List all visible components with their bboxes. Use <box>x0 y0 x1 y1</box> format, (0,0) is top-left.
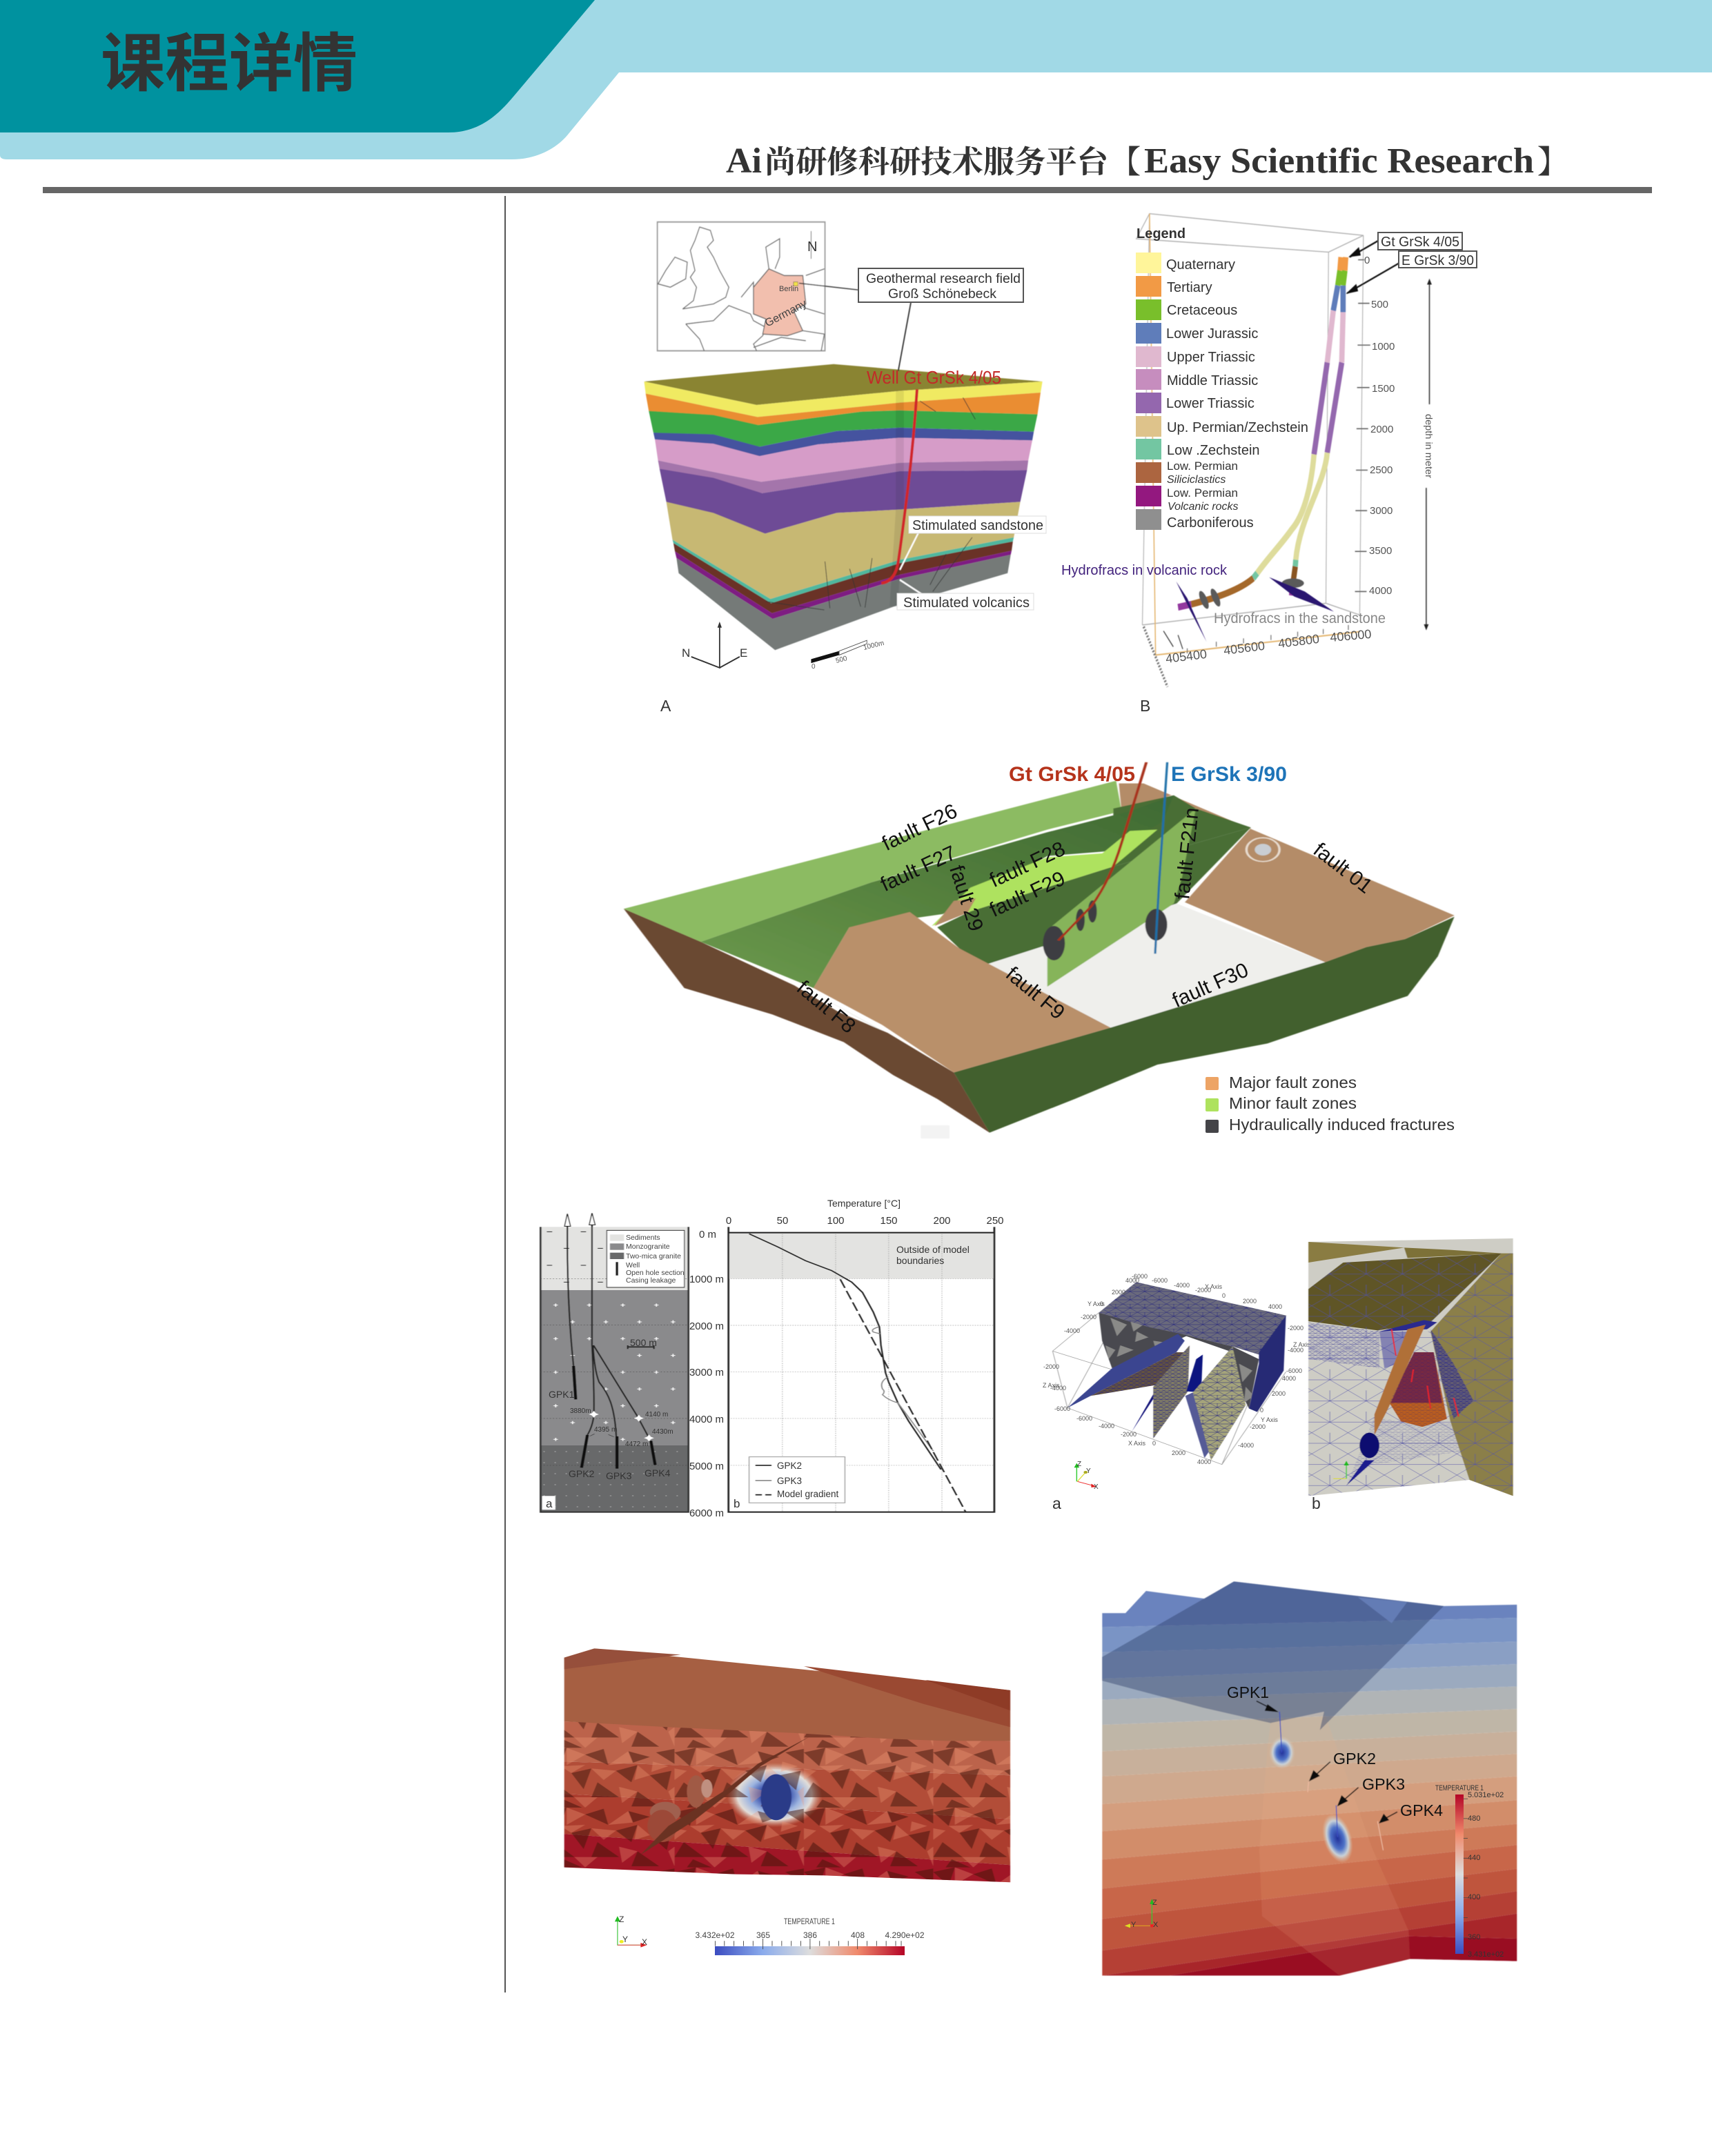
well names and depths: a <box>546 1497 553 1510</box>
axis tick labels: X Axis <box>1128 1440 1146 1447</box>
axis tick labels: -2000 <box>1081 1314 1096 1321</box>
well names and depths: 4430m <box>652 1428 673 1436</box>
axis tick labels: Y Axis <box>1261 1416 1278 1423</box>
fault labels: fault F28 <box>986 838 1069 892</box>
axis tick labels: -4000 <box>1288 1347 1303 1354</box>
axis tick labels: -4000 <box>1238 1442 1254 1449</box>
orientation axes: X <box>1153 1921 1159 1929</box>
temperature colour bar: 3.432e+02 <box>695 1930 735 1940</box>
depth axis: 1500 <box>1372 383 1395 395</box>
orientation axes: Y <box>1131 1921 1137 1929</box>
subtitle: Easy Scientific Research <box>1144 141 1534 181</box>
callout: stimulated sandstone: Stimulated sandstone <box>912 518 1043 533</box>
panel: well trajectories B <box>1061 214 1477 715</box>
well labels <box>1009 763 1287 786</box>
axis tick labels: -2000 <box>1195 1287 1211 1294</box>
compass and scale bar <box>682 622 885 671</box>
temperature axis: 100 <box>827 1215 845 1227</box>
orientation axes <box>615 1915 647 1948</box>
depth axis: 0 <box>1364 255 1370 266</box>
legend labels <box>1166 257 1308 531</box>
fault zone legend: Minor fault zones <box>1229 1094 1357 1112</box>
legend labels: Tertiary <box>1167 280 1212 295</box>
compass and scale bar: 0 <box>811 663 816 671</box>
axis tick labels: -4000 <box>1064 1327 1080 1334</box>
fault labels: fault 29 <box>945 862 987 934</box>
temperature colour bar: TEMPERATURE 1 <box>784 1917 835 1926</box>
temperature axis: Temperature [°C] <box>827 1198 901 1209</box>
axis tick labels: Y Axis <box>1088 1300 1105 1307</box>
figure label A: A <box>660 697 671 715</box>
fault labels: fault F29 <box>986 867 1069 922</box>
axis tick labels: -6000 <box>1054 1405 1070 1412</box>
block diagram layers <box>644 302 1043 650</box>
subtitle: Ai <box>726 141 762 181</box>
chart legend labels: Model gradient <box>777 1489 839 1499</box>
callout: geothermal research field: Groß Schönebeck <box>888 287 997 301</box>
legend labels: Quaternary <box>1166 257 1235 273</box>
legend <box>1136 226 1308 531</box>
temperature colour bar: 4.290e+02 <box>885 1930 925 1940</box>
well label: Well Gt GrSk 4/05 <box>867 367 1001 388</box>
axis tick labels: -4000 <box>1174 1282 1190 1289</box>
orientation axes: Y <box>1086 1467 1091 1475</box>
map labels: Berlin <box>779 285 798 293</box>
title: 课程详情 <box>101 29 357 99</box>
axis tick labels: -2000 <box>1250 1423 1266 1430</box>
compass and scale bar: N <box>682 646 690 660</box>
callout: stimulated volcanics: Stimulated volcanics <box>903 595 1030 611</box>
depth axis: 6000 m <box>689 1507 724 1519</box>
well names and depths: 3880m <box>570 1407 591 1415</box>
axis tick labels: -6000 <box>1152 1277 1168 1284</box>
well labels: E GrSk 3/90 <box>1171 763 1287 786</box>
temperature colour bar: 408 <box>851 1930 865 1940</box>
panel: temperature field left <box>564 1648 1010 1955</box>
axis tick labels: 0 <box>1260 1407 1263 1414</box>
compass and scale bar: 1000m <box>863 640 885 652</box>
callout: geothermal research field: Geothermal research field <box>866 272 1021 286</box>
depth axis: depth in meter <box>1424 414 1435 478</box>
axis tick labels: Z Axis <box>1293 1341 1310 1348</box>
depth axis <box>689 1229 724 1519</box>
well name callouts: Gt GrSk 4/05 <box>1381 235 1459 250</box>
orientation axes: X <box>1094 1483 1099 1491</box>
well labels: GPK1 <box>1227 1683 1269 1701</box>
temperature colour bar: TEMPERATURE 1 <box>1435 1784 1484 1792</box>
axis tick labels: 0 <box>1152 1440 1156 1447</box>
legend: Legend <box>1137 226 1185 241</box>
well labels: Gt GrSk 4/05 <box>1009 763 1135 786</box>
fault labels: fault F8 <box>792 976 860 1038</box>
temperature colour bar: 365 <box>756 1930 770 1940</box>
well name callouts: E GrSk 3/90 <box>1401 253 1474 268</box>
easting axis labels: 405400 <box>1165 647 1208 666</box>
light blue band <box>0 0 1712 159</box>
legend labels: Siliciclastics <box>1167 474 1226 486</box>
depth axis: 1000 <box>1372 341 1395 353</box>
depth axis: 4000 <box>1369 585 1392 597</box>
legend labels: Carboniferous <box>1167 515 1254 531</box>
axis tick labels: -6000 <box>1076 1415 1092 1422</box>
easting axis labels: 406000 <box>1330 627 1372 644</box>
axis tick labels: 0 <box>1100 1300 1103 1307</box>
axis tick labels: 2000 <box>1112 1289 1125 1296</box>
axis tick labels: 2000 <box>1172 1450 1185 1456</box>
fault labels: fault F21n <box>1171 807 1203 900</box>
axis tick labels: 4000 <box>1197 1458 1211 1465</box>
chart annotation: boundaries <box>896 1255 944 1266</box>
panel: mesh model a <box>1043 1273 1310 1512</box>
legend swatches <box>1136 253 1161 530</box>
legend labels: Volcanic rocks <box>1168 501 1239 513</box>
section legend labels <box>626 1234 685 1285</box>
fault zone legend: Hydraulically induced fractures <box>1229 1116 1455 1134</box>
temperature colour bar: 3.431e+02 <box>1468 1950 1504 1959</box>
section legend labels: Open hole section <box>626 1269 685 1277</box>
figure label b: b <box>1312 1494 1321 1512</box>
depth axis: 5000 m <box>689 1461 724 1472</box>
depth axis: 1000 m <box>689 1274 724 1285</box>
temperature colour bar: 5.031e+02 <box>1468 1791 1504 1799</box>
axis tick labels: 4000 <box>1125 1277 1139 1284</box>
well names and depths: 500 m <box>630 1337 657 1348</box>
axis tick labels: 4000 <box>1268 1303 1282 1310</box>
legend labels: Low. Permian <box>1167 459 1238 473</box>
subtitle: 尚研修科研技术服务平台 <box>765 137 1110 181</box>
panel: fault zone model <box>624 762 1455 1138</box>
depth axis: 0 m <box>699 1229 716 1240</box>
temperature axis: 200 <box>933 1215 951 1227</box>
3D frame and wells <box>1137 214 1432 687</box>
legend labels: Lower Triassic <box>1166 396 1255 411</box>
orientation axes: X <box>642 1937 647 1947</box>
axis tick labels: -6000 <box>1132 1273 1148 1280</box>
orientation axes <box>1125 1899 1159 1929</box>
hydrofrac labels <box>1061 563 1386 626</box>
fault zone legend <box>1206 1074 1455 1134</box>
well names and depths: GPK2 <box>569 1468 595 1479</box>
legend labels: Middle Triassic <box>1167 373 1258 388</box>
plot area and curves <box>729 1227 994 1512</box>
callout: geothermal research field <box>858 268 1023 302</box>
well names and depths: 4140 m <box>645 1411 668 1418</box>
figure label b: b <box>734 1497 740 1510</box>
section legend labels: Monzogranite <box>626 1243 670 1251</box>
temperature axis: 50 <box>777 1215 788 1227</box>
axis tick labels: X Axis <box>1205 1283 1223 1290</box>
depth axis <box>1364 255 1435 597</box>
axis tick labels: 2000 <box>1243 1298 1257 1305</box>
chart legend labels <box>777 1461 839 1499</box>
chart annotation <box>896 1244 970 1266</box>
axis tick labels <box>1043 1273 1310 1465</box>
map labels: N <box>807 239 817 255</box>
section legend labels: Sediments <box>626 1234 660 1242</box>
depth axis: 500 <box>1371 299 1388 310</box>
location map inset <box>658 222 858 350</box>
legend labels: Up. Permian/Zechstein <box>1167 420 1308 435</box>
panel: geological block A <box>644 222 1046 715</box>
compass and scale bar: 500 <box>835 655 848 665</box>
temperature axis: 0 <box>726 1215 731 1227</box>
orientation axes: Z <box>619 1915 624 1924</box>
well names and depths: 4472 m <box>625 1441 648 1448</box>
hydrofrac labels: Hydrofracs in volcanic rock <box>1061 563 1228 578</box>
hydrofrac labels: Hydrofracs in the sandstone <box>1214 611 1386 626</box>
legend labels: Low .Zechstein <box>1167 443 1260 458</box>
axis tick labels: 2000 <box>1272 1390 1286 1397</box>
fault labels: fault F9 <box>1001 962 1069 1025</box>
column divider <box>504 196 506 1992</box>
orientation axes <box>1074 1461 1099 1491</box>
legend labels: Upper Triassic <box>1167 350 1255 365</box>
easting axis labels: 405600 <box>1223 639 1266 657</box>
temperature colour bar: 480 <box>1468 1814 1480 1823</box>
well labels: GPK4 <box>1400 1801 1443 1819</box>
axis tick labels: -2000 <box>1043 1363 1059 1370</box>
depth axis: 3000 m <box>689 1367 724 1378</box>
depth axis: 2000 m <box>689 1321 724 1332</box>
legend labels: Low. Permian <box>1167 486 1238 500</box>
compass and scale bar: E <box>740 646 747 660</box>
axis tick labels: 0 <box>1222 1292 1226 1299</box>
orientation axes: Z <box>1152 1899 1157 1907</box>
panel: mesh close-up b <box>1308 1238 1513 1512</box>
fault labels: fault F27 <box>877 842 960 896</box>
temperature colour bar: 386 <box>803 1930 817 1940</box>
axis tick labels: -4000 <box>1099 1423 1114 1430</box>
well names and depths: GPK3 <box>606 1470 632 1481</box>
chart annotation: Outside of model <box>896 1244 970 1255</box>
orientation axes: Y <box>622 1935 628 1944</box>
axis tick labels: Z Axis <box>1043 1382 1060 1389</box>
orientation axes: Z <box>1077 1461 1081 1468</box>
well names and depths: GPK4 <box>645 1467 671 1478</box>
well labels: GPK3 <box>1362 1775 1405 1793</box>
fault labels: fault F30 <box>1169 959 1252 1012</box>
meshed block <box>1052 1282 1286 1465</box>
depth axis: 3000 <box>1370 505 1393 517</box>
fault labels: fault F26 <box>878 800 961 856</box>
easting axis labels: 405800 <box>1277 632 1320 651</box>
map labels: Germany <box>763 298 809 330</box>
well names and depths: GPK1 <box>549 1389 575 1400</box>
panel: well section a <box>540 1213 689 1512</box>
temperature colour bar <box>1435 1784 1504 1959</box>
easting axis labels <box>1165 627 1372 666</box>
teal tab <box>0 0 595 132</box>
depth axis: 4000 m <box>689 1414 724 1425</box>
3D fault block <box>624 762 1455 1138</box>
header rule <box>43 187 1652 193</box>
axis tick labels: -2000 <box>1121 1431 1137 1438</box>
axis tick labels: 4000 <box>1282 1375 1296 1382</box>
temperature colour bar: 360 <box>1468 1933 1480 1941</box>
temperature colour bar: 440 <box>1468 1854 1480 1862</box>
depth axis: 2000 <box>1370 424 1393 435</box>
subtitle <box>726 137 1568 181</box>
chart legend labels: GPK3 <box>777 1476 802 1486</box>
temperature axis: 150 <box>880 1215 898 1227</box>
section legend labels: Well <box>626 1261 640 1269</box>
axis tick labels: -2000 <box>1288 1325 1303 1332</box>
chart: temperature profile b <box>689 1198 1004 1519</box>
chart legend labels: GPK2 <box>777 1461 802 1471</box>
section legend labels: Casing leakage <box>626 1276 676 1285</box>
subtitle: 】 <box>1537 137 1568 181</box>
well names and depths <box>546 1337 673 1510</box>
refined mesh view <box>1308 1238 1513 1496</box>
geology section <box>540 1213 689 1512</box>
axis tick labels: -6000 <box>1286 1367 1302 1374</box>
temperature axis: 250 <box>986 1215 1004 1227</box>
temperature axis <box>726 1198 1004 1227</box>
panel: temperature field right <box>1102 1573 1517 1976</box>
legend labels: Cretaceous <box>1167 303 1237 318</box>
well name callouts <box>1378 233 1477 268</box>
fault zone legend: Major fault zones <box>1229 1074 1357 1091</box>
well labels: GPK2 <box>1333 1750 1376 1768</box>
map labels <box>763 239 817 330</box>
subtitle: 【 <box>1110 137 1141 181</box>
well names and depths: 4395 m <box>594 1426 617 1434</box>
fault labels <box>792 800 1377 1038</box>
temperature colour bar <box>695 1917 925 1955</box>
block with cooled zone <box>564 1648 1010 1882</box>
section legend labels: Two-mica granite <box>626 1252 681 1260</box>
well labels <box>1227 1683 1443 1819</box>
axis tick labels: -4000 <box>1050 1385 1066 1392</box>
header banner <box>0 0 1712 159</box>
legend labels: Lower Jurassic <box>1166 326 1258 342</box>
fault labels: fault 01 <box>1309 838 1377 898</box>
figure label B: B <box>1140 697 1150 715</box>
depth axis: 2500 <box>1370 464 1393 476</box>
figure label a: a <box>1052 1494 1061 1512</box>
temperature colour bar: 400 <box>1468 1893 1480 1901</box>
banded temperature section <box>1102 1573 1517 1976</box>
depth axis: 3500 <box>1369 545 1392 557</box>
